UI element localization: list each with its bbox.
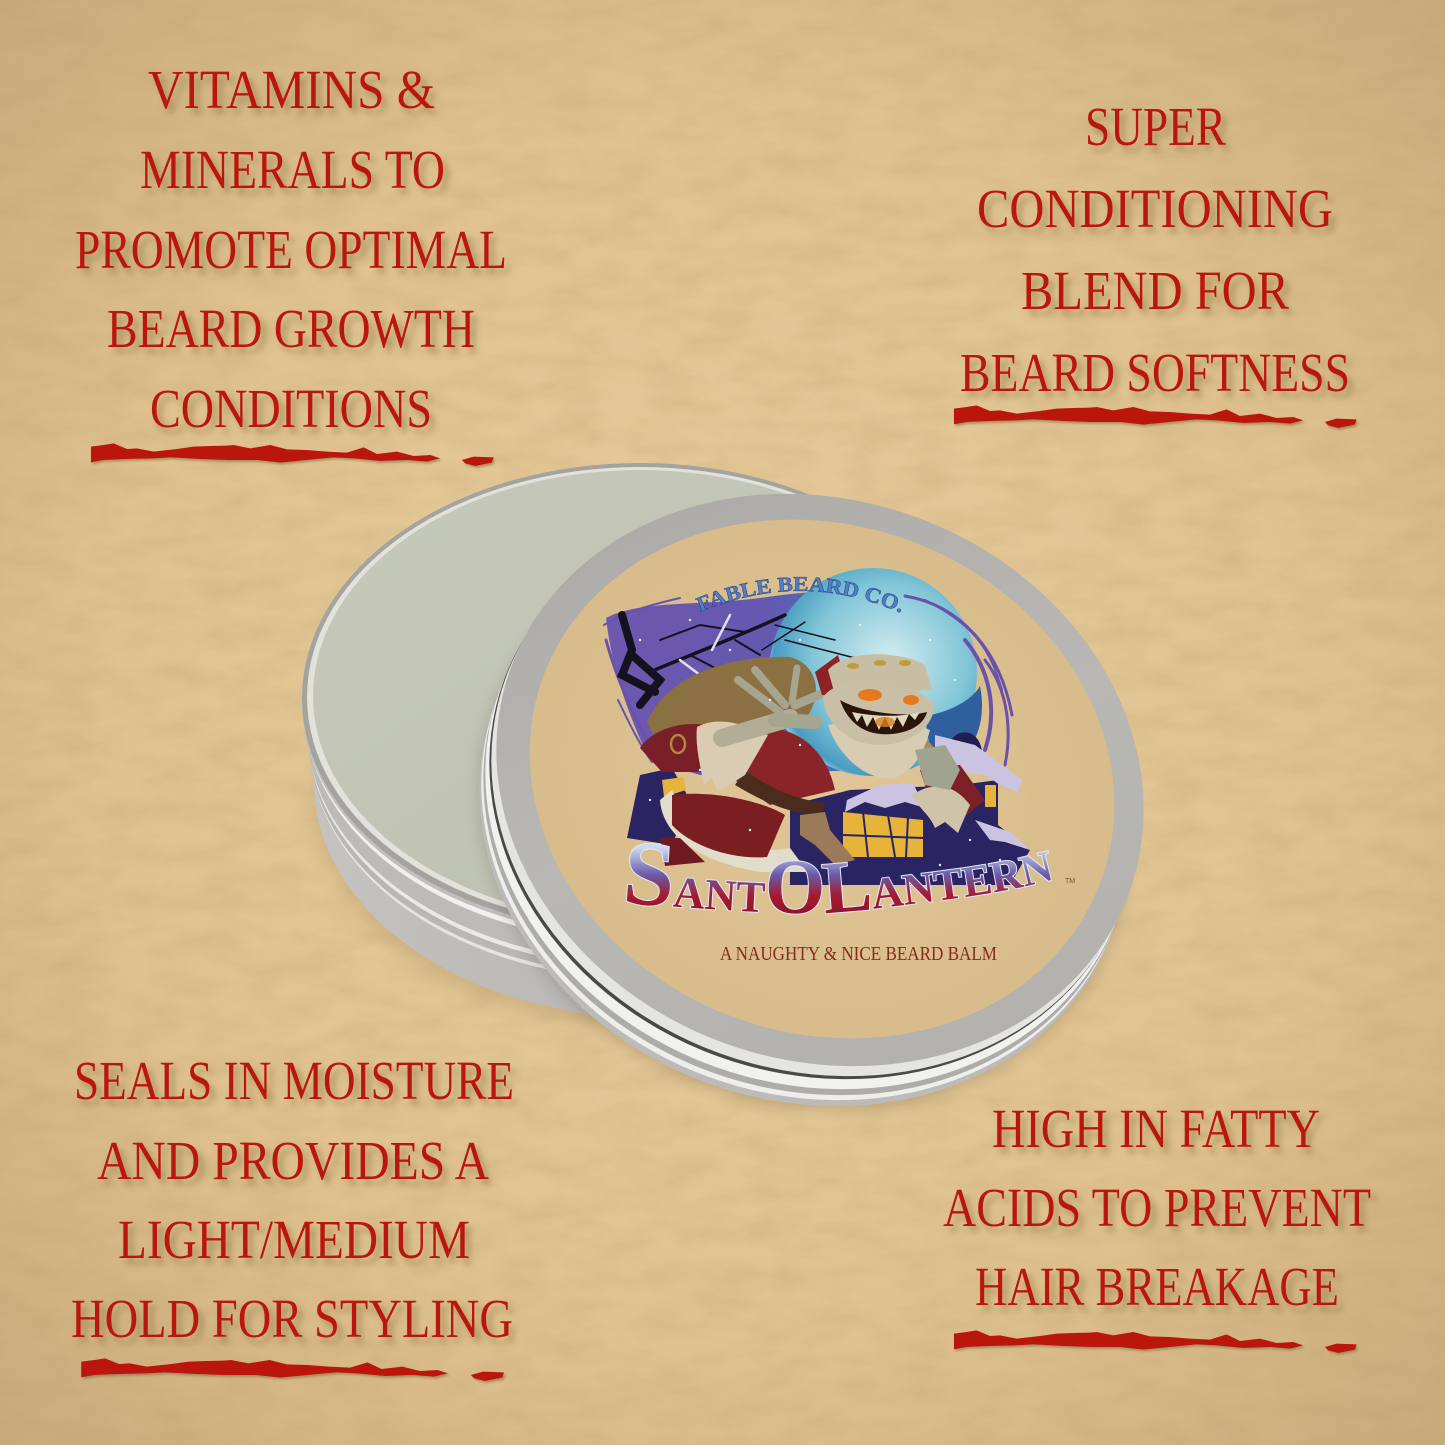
moon [769, 568, 977, 776]
hat [815, 655, 850, 695]
distant cottage [948, 732, 982, 760]
product name: SANTOLANTERN [626, 842, 1052, 915]
lower hand [915, 745, 960, 790]
benefit text: vitamins and minerals [75, 59, 507, 439]
fur trim [697, 722, 768, 792]
torn underline: fatty acids block [954, 1330, 1357, 1353]
gold buttons [847, 660, 911, 669]
torn underline: moisture block [81, 1358, 504, 1381]
benefit text: seals in moisture: SEALS IN MOISTURE [74, 1050, 514, 1111]
gold ring on hood [671, 735, 685, 753]
jack-o-lantern head [823, 680, 934, 745]
benefit text: fatty acids: ACIDS TO PREVENT [943, 1177, 1371, 1238]
night sky below moon [925, 686, 982, 752]
benefit text: super conditioning: CONDITIONING [977, 178, 1333, 239]
lid top face ring [415, 404, 1225, 1156]
trademark: TM [1065, 878, 1075, 885]
benefit text: super conditioning [960, 96, 1350, 403]
benefit text: fatty acids: HAIR BREAKAGE [975, 1256, 1339, 1317]
benefit text: fatty acids: HIGH IN FATTY [992, 1098, 1320, 1159]
torn underline: vitamins block [91, 443, 494, 466]
voodoo doll [800, 812, 855, 865]
house silhouette, right [790, 780, 1030, 885]
beard [828, 715, 930, 778]
benefit text: vitamins and minerals: VITAMINS & [148, 59, 435, 120]
belt [735, 770, 825, 815]
benefit text: vitamins and minerals: BEARD GROWTH [107, 298, 475, 359]
swirl streaks [604, 596, 1012, 765]
label illustration [603, 568, 1075, 965]
benefit text: seals in moisture: AND PROVIDES A [97, 1130, 489, 1191]
benefit text: fatty acids [943, 1098, 1371, 1317]
benefit text: vitamins and minerals: CONDITIONS [150, 378, 432, 439]
benefit text: seals in moisture [71, 1050, 514, 1349]
brand arc text: FABLE BEARD CO. [695, 576, 901, 612]
benefit text: seals in moisture: LIGHT/MEDIUM [118, 1209, 470, 1270]
tin lid [398, 404, 1225, 1198]
loot sack [647, 657, 816, 738]
benefit text: super conditioning: SUPER [1085, 96, 1226, 157]
bare tree [622, 615, 855, 705]
falling snow [639, 619, 1001, 866]
glowing eyes [858, 689, 919, 705]
sack neck [910, 735, 960, 795]
benefit text: super conditioning: BLEND FOR [1021, 260, 1289, 321]
torn underline: conditioning block [954, 405, 1357, 428]
lit windows [662, 777, 996, 857]
benefit text: vitamins and minerals: MINERALS TO [140, 139, 445, 200]
benefit text: super conditioning: BEARD SOFTNESS [960, 342, 1350, 403]
toothy mouth [840, 700, 927, 734]
purple swirl background [606, 591, 870, 775]
open tin base with balm [302, 463, 1005, 1030]
raised clawed hand [722, 668, 845, 738]
tagline: A NAUGHTY & NICE BEARD BALM [720, 943, 997, 965]
benefit text: vitamins and minerals: PROMOTE OPTIMAL [75, 219, 507, 280]
snow roofs [845, 735, 1030, 850]
coat [640, 724, 985, 872]
balm surface [313, 470, 967, 922]
lid paper label [456, 439, 1188, 1119]
benefit text: seals in moisture: HOLD FOR STYLING [71, 1288, 513, 1349]
house silhouette, left [627, 768, 690, 845]
